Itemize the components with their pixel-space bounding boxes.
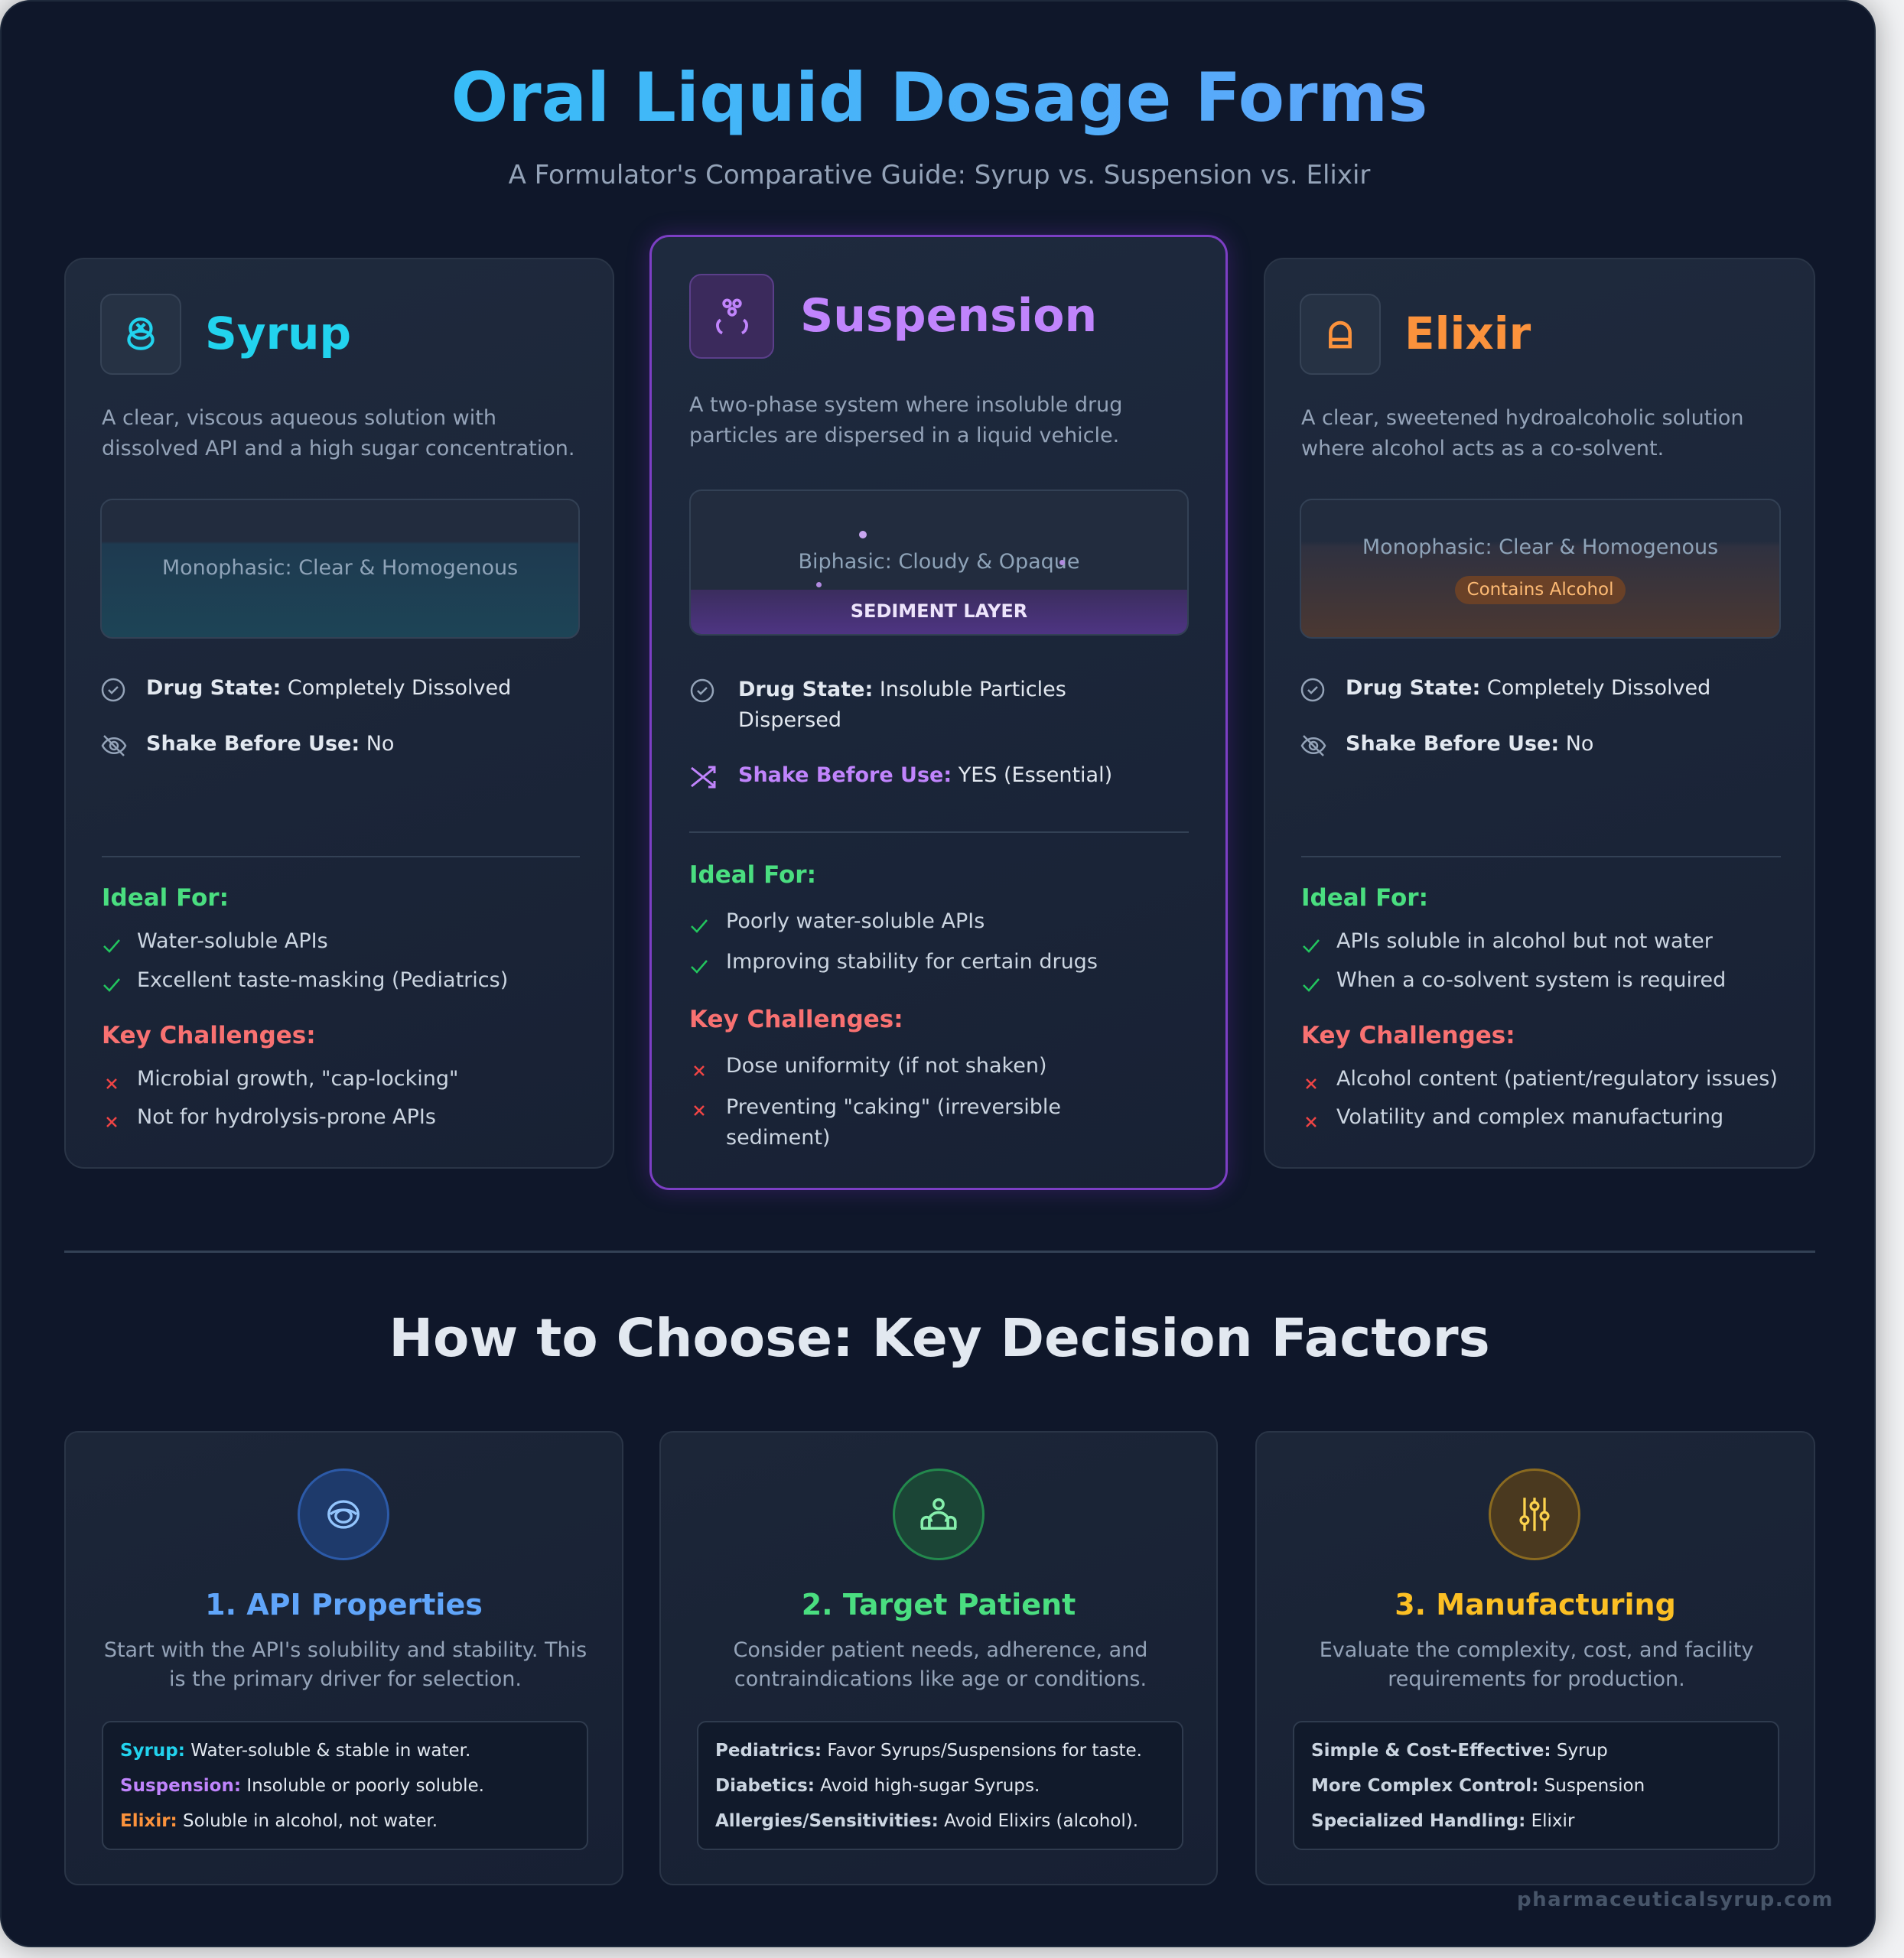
heading: manufacturing: 3. Manufacturing [1395, 1588, 1676, 1621]
panel: suspension: Improving stability for certain drugs [726, 950, 1098, 974]
panel: elixir: When a co-solvent system is required [1336, 968, 1726, 992]
list: suspension ideal [691, 909, 1098, 974]
drug state [101, 676, 511, 702]
drug state [1300, 676, 1710, 702]
box: api details: Syrup: Water-soluble & stable in water. [120, 1741, 470, 1761]
icon: manufacturing [1489, 1468, 1580, 1560]
text: suspension description: A two-phase system where insoluble drug particles are dispersed in a liquid vehicle. [689, 393, 1122, 447]
text: syrup description: A clear, viscous aqueous solution with dissolved API and a high sugar concentration. [102, 406, 574, 460]
panel: suspension: Shake Before Use: YES (Essential) [738, 763, 1112, 787]
box: manufacturing details [1293, 1721, 1779, 1850]
box: patient details [697, 1721, 1183, 1850]
heading: how to choose: How to Choose: Key Decision Factors [389, 1308, 1490, 1369]
panel: manufacturing [1255, 1431, 1815, 1885]
box: api details: Suspension: Insoluble or poorly soluble. [120, 1776, 484, 1796]
heading: target patient: 2. Target Patient [802, 1588, 1076, 1621]
panel: syrup [64, 258, 614, 1169]
text: elixir description: A clear, sweetened hydroalcoholic solution where alcohol acts as a co-solvent. [1301, 406, 1743, 460]
panel: syrup: Not for hydrolysis-prone APIs [137, 1105, 436, 1129]
panel: suspension: Dose uniformity (if not shaken) [726, 1054, 1046, 1078]
shake before use: yes [691, 763, 1112, 788]
text: api description: Start with the API's solubility and stability. This is the primary driver for selection. [104, 1638, 587, 1691]
key challenges: Key Challenges: [689, 1006, 903, 1033]
watermark: pharmaceuticalsyrup.com [1517, 1888, 1834, 1911]
panel: elixir: Shake Before Use: No [1346, 732, 1593, 756]
panel: elixir: Volatility and complex manufacturing [1336, 1105, 1723, 1129]
text: patient description: Consider patient needs, adherence, and contraindications like age or conditions. [734, 1638, 1147, 1691]
box: patient details: Allergies/Sensitivities: Avoid Elixirs (alcohol). [715, 1811, 1138, 1831]
box: patient details: Diabetics: Avoid high-sugar Syrups. [715, 1776, 1040, 1796]
panel: syrup: Drug State: Completely Dissolved [146, 676, 511, 700]
heading: syrup: Syrup [205, 307, 351, 359]
visual: monophasic with alcohol: Monophasic: Clear & Homogenous [1362, 535, 1718, 559]
box: manufacturing details: Specialized Handling: Elixir [1311, 1811, 1574, 1831]
icon: elixir [1300, 294, 1381, 375]
panel: suspension: Poorly water-soluble APIs [726, 909, 985, 933]
icon: suspension [689, 274, 774, 359]
subtitle: A Formulator's Comparative Guide: Syrup vs. Suspension vs. Elixir [509, 160, 1370, 190]
visual: monophasic [100, 499, 580, 639]
title: Oral Liquid Dosage Forms [451, 58, 1428, 137]
box: api details: Elixir: Soluble in alcohol, not water. [120, 1811, 438, 1831]
visual: monophasic: Monophasic: Clear & Homogenous [162, 556, 518, 580]
panel: syrup: Microbial growth, "cap-locking" [137, 1067, 458, 1091]
panel: suspension: Preventing "caking" (irreversible sediment) [726, 1095, 1061, 1150]
panel: syrup: Excellent taste-masking (Pediatrics) [137, 968, 508, 992]
heading: api properties: 1. API Properties [205, 1588, 483, 1621]
list: suspension challenges [694, 1054, 1061, 1150]
box: manufacturing details: More Complex Control: Suspension [1311, 1776, 1645, 1796]
panel: target patient [659, 1431, 1218, 1885]
panel: syrup: Shake Before Use: No [146, 732, 394, 756]
text: manufacturing description: Evaluate the complexity, cost, and facility requirements for production. [1320, 1638, 1753, 1691]
visual: biphasic: Biphasic: Cloudy & Opaque [798, 550, 1080, 574]
visual: biphasic [689, 490, 1189, 636]
ideal for: Ideal For: [102, 884, 229, 912]
panel: elixir: Drug State: Completely Dissolved [1346, 676, 1710, 700]
heading: elixir: Elixir [1404, 307, 1531, 359]
key challenges: Key Challenges: [1301, 1022, 1515, 1049]
list: elixir ideal [1303, 929, 1726, 992]
visual: biphasic: SEDIMENT LAYER [851, 600, 1027, 622]
list: syrup challenges [106, 1067, 458, 1129]
list: elixir challenges [1306, 1067, 1778, 1129]
shake before use [1300, 732, 1593, 756]
icon: syrup [100, 294, 181, 375]
box: manufacturing details: Simple & Cost-Effective: Syrup [1311, 1741, 1608, 1761]
box: api details [102, 1721, 588, 1850]
panel: syrup: Water-soluble APIs [137, 929, 328, 953]
box: patient details: Pediatrics: Favor Syrups/Suspensions for taste. [715, 1741, 1142, 1761]
drug state [690, 678, 1066, 732]
panel: suspension: Drug State: Insoluble Particles Dispersed [738, 678, 1066, 732]
icon: api [298, 1468, 389, 1560]
panel: elixir [1264, 258, 1815, 1169]
shake before use [101, 732, 394, 756]
badge: contains alcohol: Contains Alcohol [1467, 580, 1613, 600]
panel: elixir: APIs soluble in alcohol but not water [1336, 929, 1713, 953]
panel: api properties [64, 1431, 623, 1885]
icon: patient [893, 1468, 985, 1560]
heading: suspension: Suspension [800, 289, 1097, 343]
badge: contains alcohol [1455, 576, 1626, 604]
panel: suspension [649, 235, 1228, 1190]
ideal for: Ideal For: [1301, 884, 1428, 912]
panel: elixir: Alcohol content (patient/regulatory issues) [1336, 1067, 1778, 1091]
list: syrup ideal [103, 929, 508, 992]
key challenges: Key Challenges: [102, 1022, 316, 1049]
ideal for: Ideal For: [689, 861, 816, 889]
visual: monophasic with alcohol [1300, 499, 1781, 639]
